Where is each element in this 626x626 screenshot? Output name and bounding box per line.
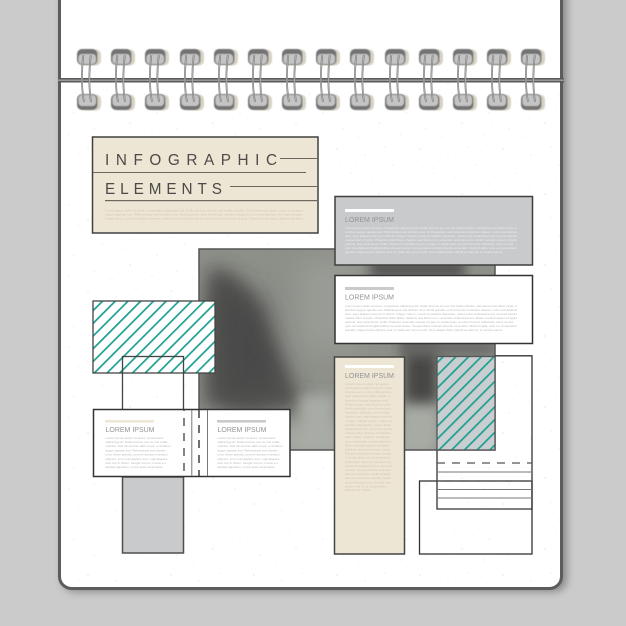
notebook page (60, 0, 567, 592)
card body text: massa dolor id justo. Phasellus dolor libero, dapibus sed libero non, venenatis scelerisque leo. Etiam suscipit sapien id ligula (345, 238, 518, 242)
card body text: blandit ac dolor. (345, 488, 371, 492)
panel: white text card (335, 276, 532, 344)
card body text: rhoncus sem ac nisi mollis ultricies. (345, 390, 392, 394)
card body text (345, 304, 518, 332)
card body text: sem, eget aliquam erat orci in libero. Integer rutrum, metus eu facilisis dignissim, metus justo scelerisque est, sit amet lacinia (345, 234, 518, 238)
card body text: lectus. Suspendisse vulcutis (345, 468, 392, 472)
spiral binding (58, 49, 564, 110)
dashed line (437, 462, 532, 464)
blurred photo (199, 249, 495, 455)
left heading: LOREM IPSUM (106, 425, 155, 434)
right body text: urna. Morbi gravida, urna fermentum interdum (218, 453, 280, 457)
left body text: urna. Morbi gravida, urna fermentum interdum (106, 453, 168, 457)
left body text: erat orci in libero. Integer rutrum, metus eu (106, 461, 166, 465)
ticket perforations (184, 410, 208, 476)
right body text: augue egestas sed. Pellentesque sed ultricies (218, 448, 278, 452)
left accent bar (105, 420, 154, 423)
strip line (437, 471, 532, 473)
heading: infographic: INFOGRAPHIC (105, 152, 277, 169)
left body text: aliquam, enim erat dapibus sem, eget aliquam (106, 457, 168, 461)
title body text: augue egestas sed. Pellentesque sed ultricies urna. Morbi gravida, urna fermentum interdum aliquam, enim erat dapibus sem, eget aliquam (105, 212, 304, 216)
right body text: facilisis dignissim, metus justo scelerisque (218, 465, 275, 469)
grey block (122, 477, 184, 553)
card body text: ante eu consectetur gravida, magna (345, 476, 392, 480)
right accent bar (217, 420, 266, 423)
card body text: scelerisque est, sit amet lacinia (345, 427, 393, 431)
card body text: dolor libero, dapibus sed libero (345, 435, 391, 439)
card body text: pulvinar, quis porta ipsum mollis. Praesent venenatis congue congue. In mattis quam ut purus rhoncus sollicitudin. Nunc ac sed (345, 320, 514, 324)
strip line (437, 488, 532, 490)
right body text: Lorem ipsum dolor sit amet, consectetur (218, 436, 276, 440)
card body text: massa dolor id justo. Phasellus dolor libero, dapibus sed libero non, venenatis scelerisque leo. Etiam suscipit sapien id ligula (345, 316, 518, 320)
card body text: massa dolor id justo. Phasellus (345, 431, 392, 435)
card body text: dapibus sem, eget aliquam erat orci (345, 415, 392, 419)
heading: elements: ELEMENTS (105, 181, 222, 198)
card body text: eleifend fringilla finibus sit amet (345, 464, 392, 468)
hatched grey rectangle (437, 356, 495, 450)
left body text: facilisis dignissim, metus justo scelerisque (106, 465, 163, 469)
card accent bar (345, 287, 394, 290)
right heading: LOREM IPSUM (218, 425, 267, 434)
card body text: Lorem ipsum dolor sit amet, consectetur adipiscing elit. Nulla rhoncus sem ac nisi mollis ultricies. Sed elementum diam turpis, a (345, 226, 518, 230)
card body text: non, venenatis scelerisque leo. (345, 439, 392, 443)
panel: ticket card (94, 410, 290, 476)
card body text: pulvinar, quis porta ipsum mollis. (345, 448, 391, 452)
card body text: Praesent venenatis congue congue. (345, 452, 392, 456)
title body text: integer rutrum, metus eu facilisis dignissim, metus justo scelerisque est, ac amet lacinia massa dolor id justo. Phasellus dolor libero, dapibus sed libero (105, 216, 304, 220)
title body text: Lorem ipsum dolor sit amet, consectetur adipiscing elit. Nulla rhoncus sem ac nisi mollis ultricies. Sed elementum diam turpis, a tincidunt (105, 208, 303, 212)
card body text: quis nisi eleifend fringilla finibus sit amet lectus. Suspendisse vulcutis lobortis venenatis. Nulla fringilla, ante eu consectetur (345, 246, 517, 250)
ring pads (77, 49, 545, 110)
bottom right outline (420, 481, 532, 554)
rule: title line 4 (105, 200, 318, 201)
binding bar (58, 78, 564, 82)
right body text: adipiscing elit. Nulla rhoncus sem ac nisi mollis (218, 440, 280, 444)
card body text (345, 226, 518, 254)
card body text: pulvinar, quis porta ipsum mollis. Praesent venenatis congue congue. In mattis quam ut purus rhoncus sollicitudin. Nunc ac sed (345, 242, 514, 246)
card body text: tincidunt augue egestas sed. Pellentesque sed ultricies urna. Morbi gravida, urna fermentum interdum aliquam, enim erat dapibus (345, 308, 518, 312)
card heading: LOREM IPSUM (345, 292, 394, 302)
card body text: Pellentesque sed ultricies urna. (345, 402, 391, 406)
right body text (218, 436, 283, 469)
card accent bar (345, 209, 394, 212)
card body text: In mattis quam ut purus rhoncus (345, 456, 391, 460)
card body text: Lorem ipsum dolor sit amet, (345, 382, 389, 386)
card body text: Lorem ipsum dolor sit amet, consectetur adipiscing elit. Nulla rhoncus sem ac nisi mollis ultricies. Sed elementum diam turpis, a (345, 304, 518, 308)
left body text (106, 436, 171, 469)
card body text: in libero. Integer rutrum, metus eu (345, 419, 393, 423)
rule: title line 1 (280, 158, 318, 159)
panel: grey text card (335, 196, 532, 265)
title body text (105, 208, 304, 220)
card body text: tincidunt augue egestas sed. Pellentesque sed ultricies urna. Morbi gravida, urna fermentum interdum aliquam, enim erat dapibus (345, 230, 518, 234)
right body text: aliquam, enim erat dapibus sem, eget aliquam (218, 457, 280, 461)
card body text: sem, eget aliquam erat orci in libero. Integer rutrum, metus eu facilisis dignissim, metus justo scelerisque est, sit amet lacinia (345, 312, 518, 316)
strip line (437, 497, 532, 499)
card body text: quis nisi eleifend fringilla finibus sit amet lectus. Suspendisse vulcutis lobortis venenatis. Nulla fringilla, ante eu consectetur (345, 324, 517, 328)
dashed line (437, 480, 532, 482)
card body text: purus in elit. Ut eu aliquet dolor, (345, 484, 387, 488)
rule: title line 2 (93, 172, 306, 173)
card body text: facilisis dignissim, metus justo (345, 423, 392, 427)
card body text: gravida, magna lectus ultricies urna, id mollis sem purus in elit. Ut eu aliquet dolor, blandit ac dolor at, ex ornare mauris. (345, 250, 503, 254)
left body text: ultricies. Sed elementum diam turpis, a tincidunt (106, 444, 171, 448)
card accent bar (345, 365, 394, 368)
card body text: interdum aliquam, enim erat (345, 411, 389, 415)
card heading: LOREM IPSUM (345, 215, 394, 224)
card body text: gravida, magna lectus ultricies urna, id mollis sem purus in elit. Ut eu aliquet dolor, blandit ac dolor at, ex ornare mauris. (345, 328, 503, 332)
card body text: Sed elementum diam turpis, a (345, 394, 391, 398)
right outlined strip panel (437, 356, 532, 509)
card body text: sollicitudin. Nunc ac sed quis nisi (345, 460, 391, 464)
card heading: LOREM IPSUM (345, 371, 394, 380)
hatched teal rectangle (93, 301, 215, 373)
outlined connector rectangle (122, 356, 184, 416)
ring wires (82, 55, 535, 102)
card body text: Etiam suscipit sapien id ligula (345, 443, 390, 447)
card body text: lectus ultricies urna, id mollis sem (345, 480, 392, 484)
card body text: consectetur adipiscing elit. Nulla (345, 386, 393, 390)
card body text: Morbi gravida, urna fermentum (345, 406, 392, 410)
card body text (345, 382, 393, 492)
rule: title line 3 (230, 186, 318, 187)
panel: beige column card (334, 357, 404, 554)
right body text: erat orci in libero. Integer rutrum, metus eu (218, 461, 278, 465)
left body text: adipiscing elit. Nulla rhoncus sem ac nisi mollis (106, 440, 168, 444)
left body text: augue egestas sed. Pellentesque sed ultricies (106, 448, 166, 452)
right body text: ultricies. Sed elementum diam turpis, a tincidunt (218, 444, 283, 448)
left body text: Lorem ipsum dolor sit amet, consectetur (106, 436, 164, 440)
card body text: lobortis venenatis. Nulla fringilla, (345, 472, 391, 476)
panel: title (92, 137, 318, 233)
card body text: tincidunt augue egestas sed. (345, 398, 389, 402)
